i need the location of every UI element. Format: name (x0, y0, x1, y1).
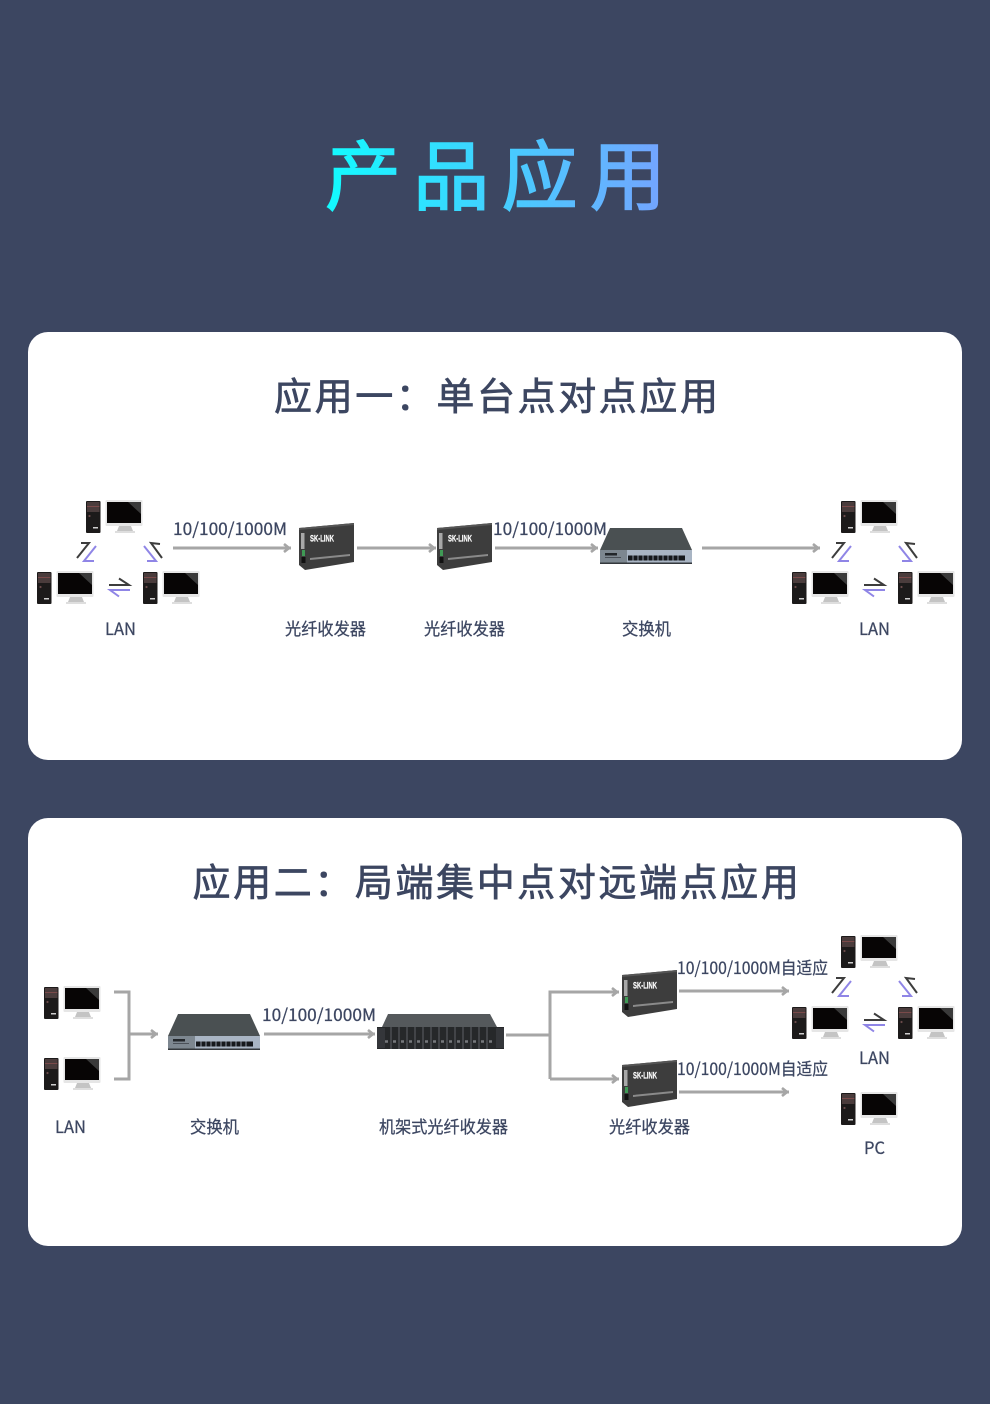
title: 产品应用 (325, 116, 678, 226)
icon: PC (841, 1092, 898, 1125)
label: PC: PC (864, 1134, 885, 1159)
arrow: switch to rack (264, 1032, 375, 1036)
icon: transceiver upper (622, 970, 677, 1017)
icon: LAN computers right (792, 935, 954, 1039)
label: rack transceiver: 机架式光纤收发器 (379, 1113, 508, 1138)
icon: LAN computers right (792, 500, 954, 604)
label: switch: 交换机 (190, 1113, 239, 1138)
icon: LAN computers left (37, 500, 200, 604)
icon: transceiver one (299, 523, 354, 570)
speed label upper: 10/100/1000M自适应 (677, 954, 828, 979)
arrow: switch to LAN (702, 546, 820, 550)
icon: switch (168, 1014, 260, 1050)
label: switch: 交换机 (622, 615, 671, 640)
icon: transceiver two (437, 523, 492, 570)
heading: application two: 应用二：局端集中点对远端点应用 (192, 852, 802, 907)
arrow: transceiver to switch (495, 546, 598, 550)
label: transceiver: 光纤收发器 (609, 1113, 690, 1138)
panel: application two (28, 818, 962, 1246)
label: LAN left: LAN (55, 1113, 86, 1138)
speed label one: 10/100/1000M (173, 515, 287, 540)
label: transceiver one: 光纤收发器 (285, 615, 366, 640)
speed label lower: 10/100/1000M自适应 (677, 1055, 828, 1080)
icon: computer lower left (44, 1057, 100, 1090)
speed label two: 10/100/1000M (493, 515, 607, 540)
label: transceiver two: 光纤收发器 (424, 615, 505, 640)
arrow: transceiver to transceiver (357, 546, 436, 550)
icon: rack transceiver (377, 1014, 504, 1049)
icon: computer upper left (44, 986, 100, 1019)
label: LAN left: LAN (105, 615, 136, 640)
panel: application one (28, 332, 962, 760)
speed label: 10/100/1000M (262, 1001, 376, 1026)
label: LAN right: LAN (859, 1044, 890, 1069)
icon: transceiver lower (622, 1060, 677, 1107)
arrow: upper transceiver to LAN (679, 990, 789, 992)
heading: application one: 应用一：单台点对点应用 (274, 366, 721, 421)
connector: rack to two transceivers (506, 992, 619, 1079)
label: LAN right: LAN (859, 615, 890, 640)
arrow: LAN to transceiver (173, 546, 291, 550)
arrow: lower transceiver to PC (679, 1090, 789, 1094)
arrow: bracket to switch (114, 992, 158, 1079)
icon: switch (600, 528, 692, 564)
